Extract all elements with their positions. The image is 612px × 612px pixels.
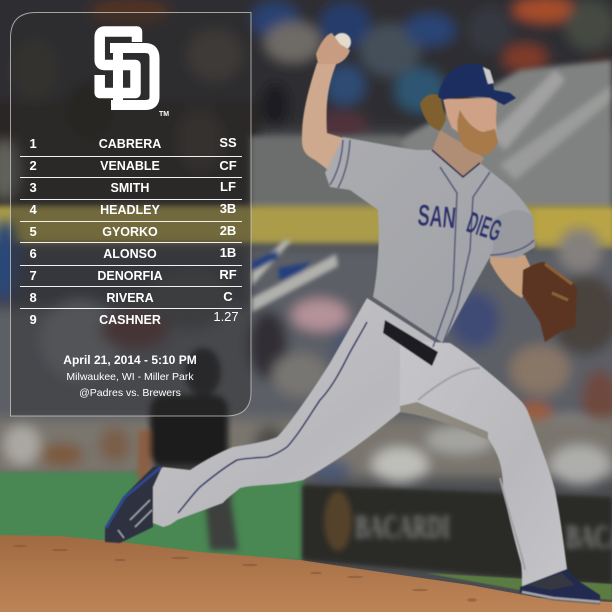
baseball bbox=[333, 33, 351, 51]
jersey sleeve shadow bbox=[490, 210, 535, 258]
matchup: @Padres vs. Brewers bbox=[79, 387, 181, 399]
positions: CF bbox=[219, 158, 237, 173]
beard bbox=[457, 110, 498, 155]
hair bbox=[420, 94, 446, 131]
banner panel bbox=[302, 485, 612, 585]
SD logo bbox=[100, 32, 169, 118]
jersey piping bbox=[330, 140, 534, 347]
player names: ALONSO bbox=[103, 247, 157, 261]
batting order numbers bbox=[30, 136, 38, 327]
blurred umpire figure bbox=[138, 348, 238, 550]
D letter bbox=[110, 48, 154, 110]
trail shoe details bbox=[118, 500, 152, 538]
green outfield wall bbox=[0, 472, 304, 562]
TM mark: TM bbox=[159, 111, 169, 118]
positions: RF bbox=[219, 267, 237, 282]
batting order numbers: 9 bbox=[30, 312, 37, 327]
right stands and railings bbox=[250, 60, 612, 208]
yellow band bbox=[0, 206, 612, 250]
positions: 3B bbox=[220, 201, 236, 216]
positions: 1B bbox=[220, 245, 236, 260]
batting order numbers: 2 bbox=[30, 158, 37, 173]
plant shoe bbox=[520, 569, 600, 604]
batting order numbers: 3 bbox=[30, 180, 37, 195]
railings blur bbox=[252, 240, 338, 312]
cap bbox=[438, 64, 516, 105]
dark advertising banner bbox=[302, 485, 612, 585]
positions bbox=[213, 135, 239, 324]
batting order numbers: 4 bbox=[30, 202, 38, 217]
player names: HEADLEY bbox=[100, 203, 161, 217]
upper crowd bbox=[0, 0, 612, 210]
pitching mound bbox=[0, 535, 612, 612]
pants: front leg bbox=[400, 340, 567, 587]
lower crowd bbox=[0, 220, 612, 465]
pants: trail leg bbox=[153, 298, 445, 527]
batting order numbers: 7 bbox=[30, 268, 37, 283]
banner emblem bbox=[324, 491, 352, 551]
jersey collar bbox=[432, 150, 480, 177]
plant shoe sole bbox=[522, 592, 600, 602]
neck bbox=[432, 130, 484, 177]
pants crease bbox=[418, 368, 525, 570]
dirt clods bbox=[13, 545, 477, 602]
S letter bbox=[100, 32, 137, 93]
batting order numbers: 6 bbox=[30, 246, 37, 261]
jersey wordmark SAN: SAN bbox=[416, 199, 457, 235]
seating row above wall bbox=[0, 418, 612, 485]
player names: SMITH bbox=[111, 181, 149, 195]
plant shoe upper bbox=[527, 573, 575, 590]
player names: VENABLE bbox=[100, 159, 160, 173]
panel backing bbox=[10, 12, 251, 416]
player names: CABRERA bbox=[99, 137, 161, 151]
hand bbox=[316, 33, 350, 64]
batting order numbers: 5 bbox=[30, 224, 37, 239]
row dividers bbox=[20, 156, 242, 308]
banner wordmark: BACARDI bbox=[355, 509, 450, 546]
cap logo bbox=[483, 67, 494, 84]
raised throwing arm bbox=[302, 62, 343, 177]
jersey torso bbox=[325, 137, 535, 343]
glove bbox=[522, 262, 577, 342]
lineup panel bbox=[10, 12, 251, 416]
positions: C bbox=[223, 289, 233, 304]
player names: GYORKO bbox=[102, 225, 158, 239]
pants piping bbox=[178, 322, 367, 513]
positions: LF bbox=[220, 179, 236, 194]
game location: Milwaukee, WI - Miller Park bbox=[66, 371, 194, 383]
batting order numbers: 1 bbox=[30, 136, 37, 151]
player names bbox=[97, 137, 163, 327]
game info bbox=[63, 353, 197, 399]
positions: 2B bbox=[220, 223, 236, 238]
glove arm bbox=[490, 255, 532, 298]
glove highlights bbox=[545, 264, 572, 300]
thigh underside shadow bbox=[400, 402, 488, 440]
grass strip bbox=[425, 573, 612, 600]
ERA value: 1.27 bbox=[213, 309, 239, 324]
trail shoe bbox=[105, 465, 163, 543]
jersey wordmark DIEG: DIEG bbox=[463, 206, 505, 248]
pitcher bbox=[105, 33, 600, 604]
belt bbox=[383, 320, 438, 366]
player names: CASHNER bbox=[99, 313, 161, 327]
player names: RIVERA bbox=[106, 291, 154, 305]
batting order numbers: 8 bbox=[30, 290, 37, 305]
positions: SS bbox=[219, 135, 237, 150]
trail shoe top edge bbox=[106, 467, 161, 528]
face bbox=[443, 98, 497, 140]
game date: April 21, 2014 - 5:10 PM bbox=[63, 353, 197, 367]
player names: DENORFIA bbox=[97, 269, 163, 283]
